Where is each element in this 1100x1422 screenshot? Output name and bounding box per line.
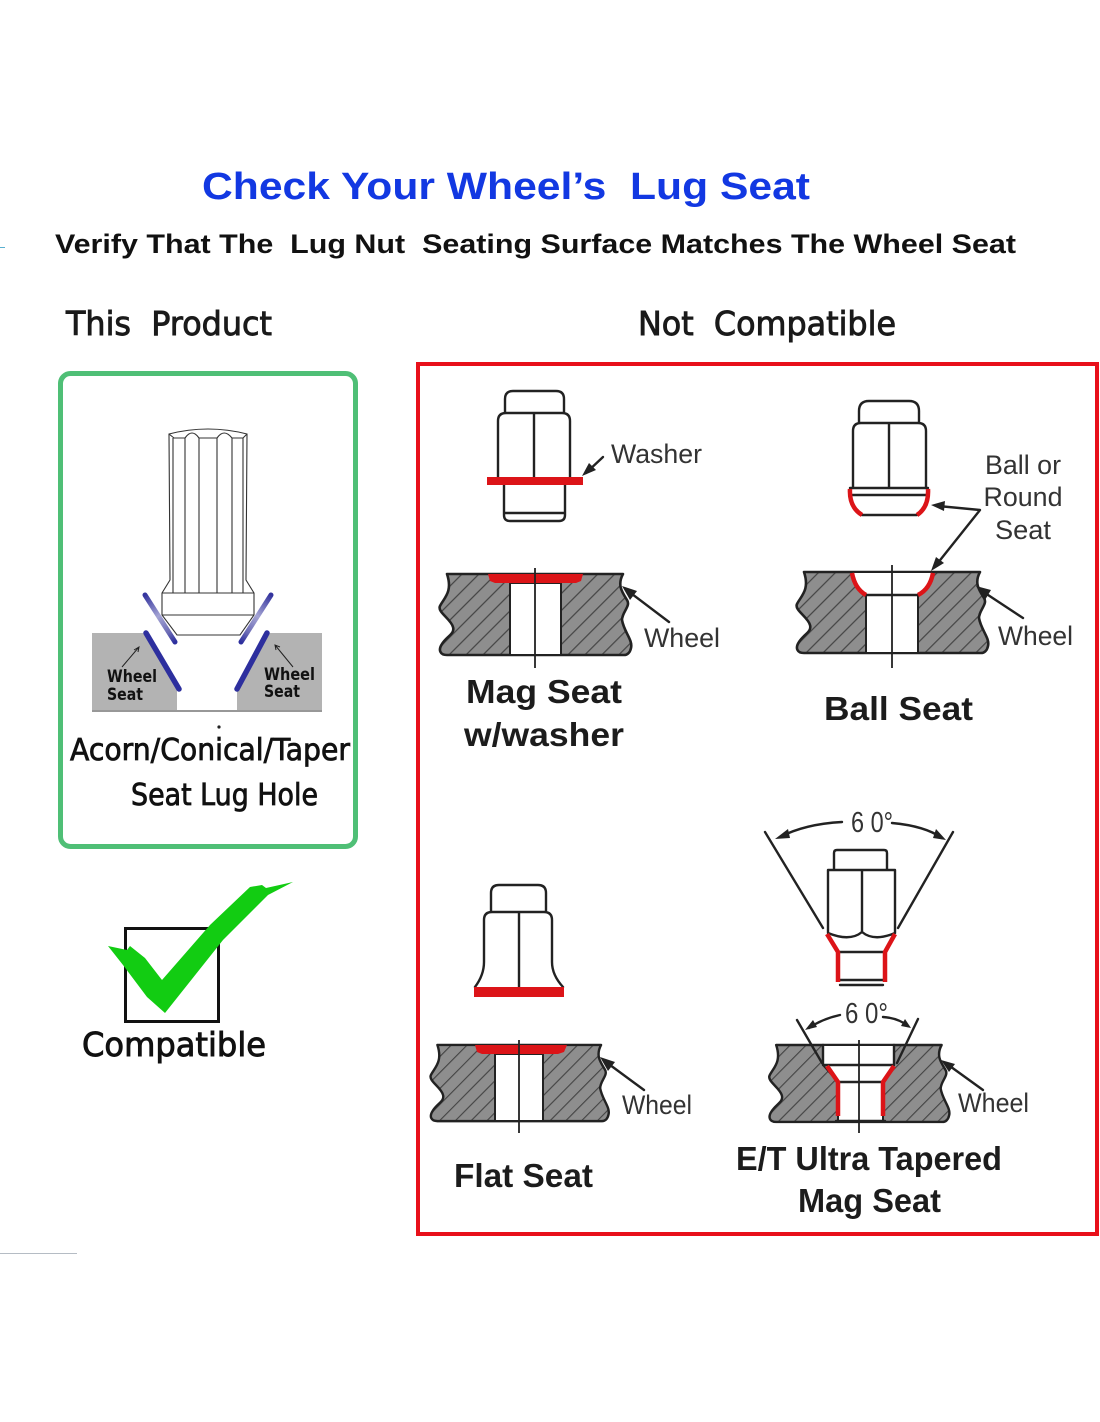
label: mag seat w/washer: w/washer	[463, 716, 624, 753]
diagram: mag seat with washer	[440, 391, 720, 753]
label: left wheel seat: Seat	[107, 685, 143, 705]
label: flat seat: Flat Seat	[454, 1157, 593, 1194]
blue seat markers on wheel	[146, 633, 267, 689]
heading: this product: This Product	[65, 304, 272, 343]
diagram: E/T ultra tapered mag seat	[736, 807, 1029, 1219]
arrows: round seat	[931, 501, 980, 571]
angle lines: lower 60 degrees	[797, 1015, 918, 1063]
label: wheel: Wheel	[958, 1088, 1029, 1118]
arrow: washer	[582, 457, 603, 476]
label: wheel: Wheel	[998, 621, 1073, 651]
caption: seat type: Seat Lug Hole	[131, 778, 318, 813]
panel: not compatible	[418, 364, 1097, 1234]
wheel seat blocks	[92, 633, 322, 711]
wheel section: tapered	[769, 1040, 949, 1133]
icon: spline lug nut	[162, 429, 254, 635]
label: wheel: Wheel	[622, 1090, 692, 1120]
subtitle: Verify That The Lug Nut Seating Surface Matches The Wheel Seat	[55, 229, 1016, 259]
icon: tapered nut	[827, 850, 895, 985]
icon: ball nut	[850, 401, 928, 515]
label: upper 60 degrees: 6 0°	[851, 807, 893, 839]
panel border: red	[418, 364, 1097, 1234]
heading: not compatible: Not Compatible	[638, 304, 896, 343]
label: left wheel seat: Wheel	[107, 667, 157, 687]
wheel section: flat	[431, 1040, 609, 1133]
label: wheel: Wheel	[644, 623, 720, 653]
icon: mag nut	[487, 391, 583, 521]
label: mag seat w/washer: Mag Seat	[466, 673, 622, 710]
small pointer arrows	[122, 645, 293, 667]
label: ball or round seat: Round	[984, 482, 1062, 512]
arrow: wheel	[600, 1057, 644, 1090]
title: Check Your Wheel’s Lug Seat	[202, 166, 810, 208]
diagram: flat seat	[431, 885, 692, 1194]
wheel section: mag	[440, 568, 631, 668]
arrow: wheel	[941, 1060, 983, 1090]
diagram: ball seat	[797, 401, 1073, 727]
label: compatible: Compatible	[82, 1025, 266, 1064]
blue seat markers on nut	[145, 595, 271, 642]
arrow: wheel	[622, 586, 669, 622]
icon: compatible checkmark	[108, 882, 293, 1022]
wheel section: ball	[797, 565, 988, 668]
caption: seat type: Acorn/Conical/Taper	[70, 733, 351, 768]
label: right wheel seat: Seat	[264, 682, 300, 702]
angle lines: upper 60 degrees	[765, 822, 953, 928]
label: ball or round seat: Seat	[995, 515, 1051, 545]
label: washer: Washer	[611, 439, 702, 469]
label: E/T ultra tapered mag seat: Mag Seat	[798, 1182, 941, 1219]
arrow: wheel	[976, 586, 1023, 618]
icon: flat nut	[474, 885, 564, 997]
panel border: green	[60, 374, 356, 846]
label: ball seat: Ball Seat	[824, 690, 973, 727]
panel: this product	[60, 374, 356, 846]
label: ball or round seat: Ball or	[985, 450, 1061, 480]
label: lower 60 degrees: 6 0°	[845, 998, 888, 1030]
label: E/T ultra tapered mag seat: E/T Ultra Tapered	[736, 1140, 1002, 1177]
label: right wheel seat: Wheel	[264, 665, 315, 685]
